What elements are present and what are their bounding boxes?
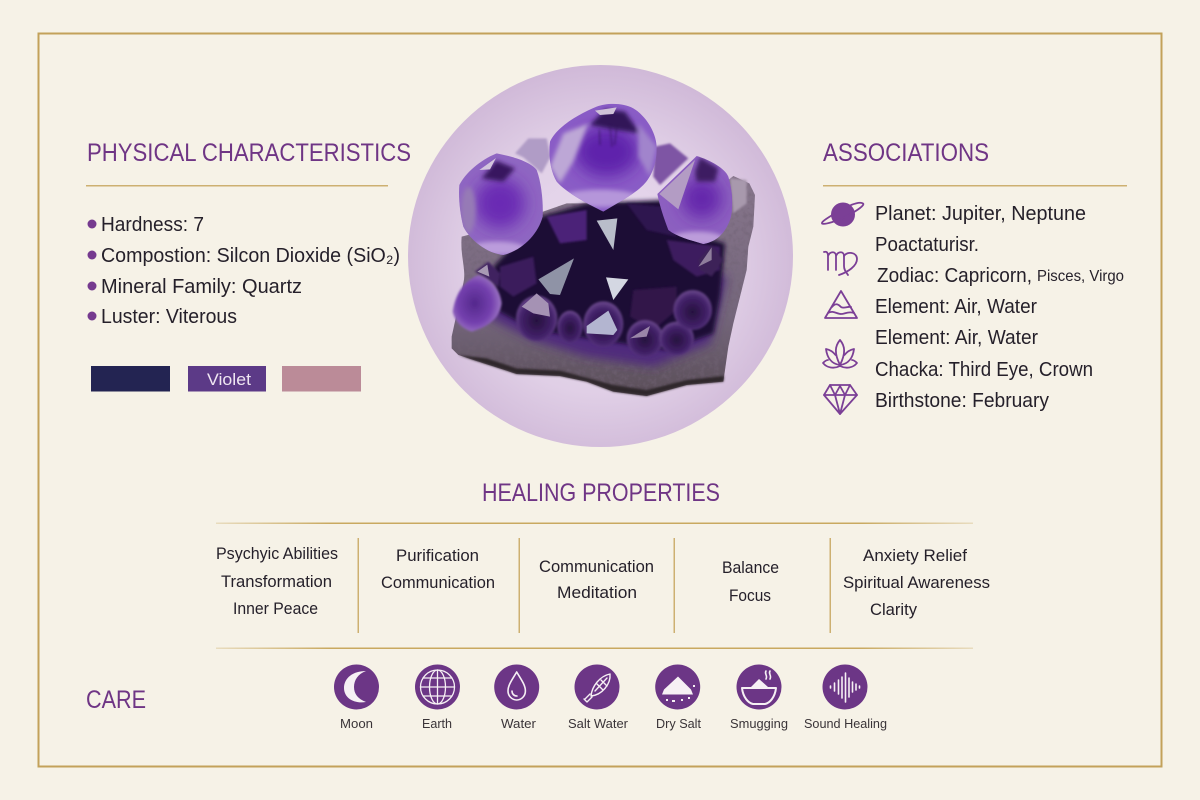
panel: physical characteristics: [86, 139, 411, 392]
healing column 5: [843, 546, 990, 619]
care item: earth: Earth: [422, 716, 452, 731]
list: physical properties: Hardness: 7: [101, 214, 204, 236]
association text lines: [875, 203, 1124, 412]
heading: associations: ASSOCIATIONS: [823, 139, 989, 167]
healing column 5: Clarity: [870, 600, 917, 619]
association text lines: Poactaturisr.: [875, 234, 979, 256]
colour swatches: [91, 366, 361, 392]
association text lines: Birthstone: February: [875, 390, 1049, 412]
icon: lotus: [823, 340, 857, 368]
care item: dry salt: Dry Salt: [656, 716, 701, 731]
care item: moon: Moon: [340, 716, 373, 731]
healing column 3: Communication: [539, 557, 654, 576]
rock base: [452, 176, 755, 396]
care item: sound healing: Sound Healing: [804, 716, 887, 731]
list: physical properties: Mineral Family: Quartz: [101, 276, 302, 298]
healing column 1: Transformation: [221, 572, 332, 591]
panel: care: [86, 664, 887, 731]
association text lines: Pisces, Virgo: [1037, 268, 1124, 285]
association text lines: Planet: Jupiter, Neptune: [875, 203, 1086, 225]
healing column 2: [381, 546, 495, 592]
purple fringe: [487, 270, 727, 367]
small bottom crystals: [516, 290, 712, 357]
heading: healing properties: HEALING PROPERTIES: [482, 479, 720, 507]
amethyst crystal cluster: [452, 100, 755, 396]
care item: salt water: Salt Water: [568, 716, 629, 731]
care item: moon: [334, 664, 379, 731]
association text lines: Zodiac: Capricorn,: [877, 265, 1032, 287]
association text lines: Chacka: Third Eye, Crown: [875, 359, 1093, 381]
healing column 5: Anxiety Relief: [863, 546, 967, 565]
care item: smudging: [730, 664, 788, 731]
heading: care: CARE: [86, 686, 146, 714]
healing column 1: Inner Peace: [233, 599, 318, 618]
list: physical properties: Compostion: Silcon Dioxide (SiO₂): [101, 245, 400, 267]
right crystal: [657, 156, 732, 244]
healing column 4: Focus: [729, 586, 771, 605]
care item: salt water: [568, 664, 629, 731]
icon: planet: [822, 202, 863, 226]
healing column 1: Psychyic Abilities: [216, 544, 338, 563]
panel: associations: [822, 139, 1127, 414]
list: physical properties: [88, 214, 400, 328]
top crystal: [550, 104, 656, 212]
care item: earth: [415, 664, 460, 731]
healing column 1: [216, 544, 338, 618]
shiny crystal facets: [477, 107, 712, 338]
dark cavity: [493, 200, 725, 350]
healing column 5: Spiritual Awareness: [843, 573, 990, 592]
panel: healing properties: [216, 479, 990, 649]
care item: dry salt: [655, 664, 701, 731]
central amethyst disc: [408, 65, 793, 447]
healing column 4: [722, 558, 779, 605]
care item: water: Water: [501, 716, 537, 731]
icon: diamond: [824, 385, 857, 414]
healing column 3: [539, 557, 654, 602]
left crystal: [459, 154, 543, 255]
care item: water: [494, 664, 539, 731]
association text lines: Element: Air, Water: [875, 296, 1037, 318]
heading: physical characteristics: PHYSICAL CHARACTERISTICS: [87, 139, 411, 167]
healing column 3: Meditation: [557, 583, 637, 602]
care item: sound healing: [804, 664, 887, 731]
healing column 2: Communication: [381, 573, 495, 592]
icon: element triangle: [825, 291, 857, 318]
lower-left crystal: [453, 275, 502, 332]
icon: zodiac virgo: [824, 252, 857, 275]
list: physical properties: Luster: Viterous: [101, 306, 237, 328]
small back crystals: [515, 138, 747, 213]
association text lines: Element: Air, Water: [875, 327, 1038, 349]
colour swatches: Violet: [207, 370, 251, 389]
care item: smudging: Smugging: [730, 716, 788, 731]
healing column 2: Purification: [396, 546, 479, 565]
healing column 4: Balance: [722, 558, 779, 577]
